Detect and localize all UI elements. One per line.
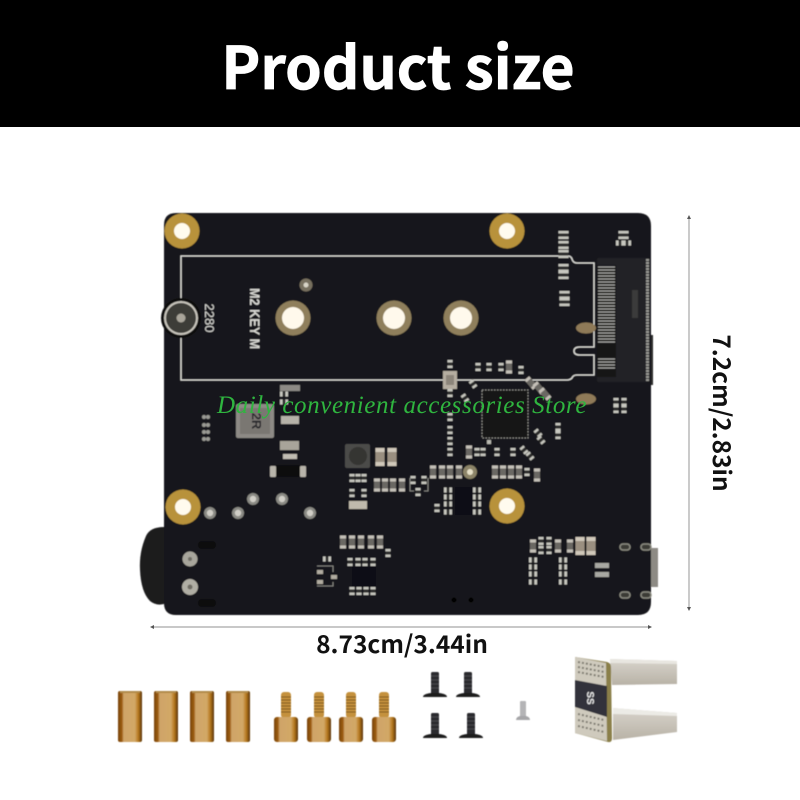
dark inductor: [345, 444, 396, 468]
left standoff screw: [161, 298, 201, 338]
panel: circuit board photo: [140, 213, 658, 615]
accessories: hex standoffs: [118, 691, 250, 742]
tan pads: [576, 322, 596, 404]
dimension arrow: height: [687, 215, 691, 611]
watermark: Daily convenient accessories Store: [216, 392, 587, 419]
accessories: black screws: [423, 672, 483, 738]
board body: [164, 213, 651, 615]
usb connector edge: [650, 548, 658, 587]
silkscreen label: M2 KEY M: M2 KEY M: [247, 288, 263, 349]
soic chip centre: [434, 487, 481, 515]
knob: rubber power button: [140, 527, 164, 605]
dimension label: width: 8.73cm/3.44in: [316, 626, 488, 661]
column of small pads: [202, 415, 210, 441]
title: Product size: [221, 21, 575, 106]
silkscreen label: 2280: 2280: [202, 304, 217, 332]
dimension arrow: width: [150, 625, 652, 629]
top right resistor cluster: [558, 231, 631, 306]
power jack screws and slots: [182, 541, 216, 607]
lower left component cluster: [317, 536, 390, 595]
small parts by inductor: [270, 385, 306, 477]
m.2 socket: [597, 258, 650, 382]
component cluster centre: [430, 413, 560, 482]
dimension label: height: 7.2cm/2.83in: [705, 334, 740, 492]
centre component row: [443, 360, 626, 413]
lower right component cluster: [529, 537, 609, 584]
accessories: threaded standoffs: [274, 692, 396, 742]
corner mounting holes: [164, 214, 524, 524]
m.2 mounting holes: [276, 278, 478, 336]
usb mounting ovals: [452, 544, 651, 602]
usb ss mark: SS: [584, 691, 595, 705]
inductor 2R: 2R: [249, 413, 264, 430]
m.2 slot outline: [181, 256, 594, 380]
header banner: [0, 0, 800, 127]
component cluster centre left: [349, 474, 428, 509]
side connector edge: [649, 335, 653, 385]
through-hole vias: [204, 493, 316, 519]
accessories: usb bridge connector: [575, 657, 677, 742]
qfn controller chip: [482, 390, 528, 444]
accessories: silver screw: [516, 701, 530, 720]
inductor 2R: [236, 404, 274, 438]
